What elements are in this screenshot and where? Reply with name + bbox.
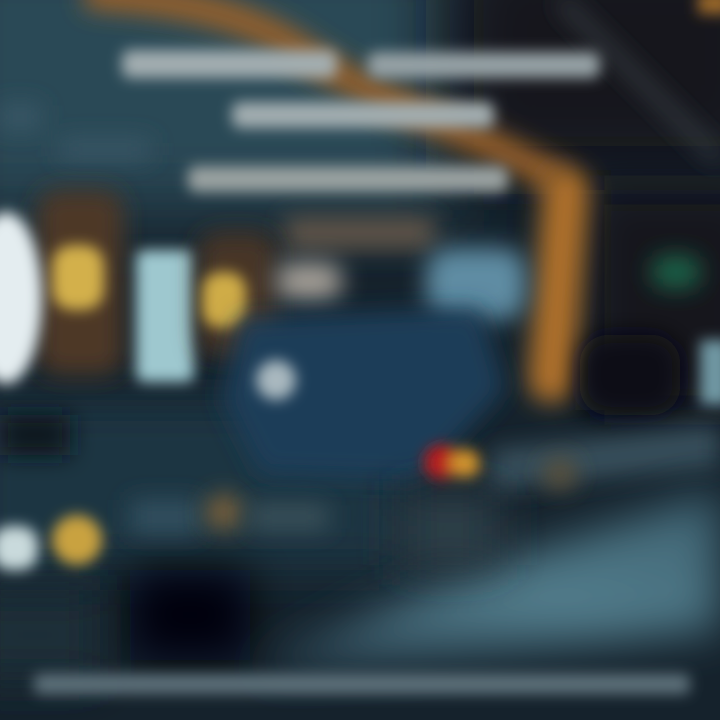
floor: teal diagonal sweep <box>250 490 720 670</box>
dark right-side objects <box>580 335 680 415</box>
lower row: legend items <box>0 494 328 570</box>
panel: second lamp glow <box>198 232 276 357</box>
decorative ceiling streak <box>560 0 720 160</box>
panel: pale teal window <box>136 250 194 382</box>
panel: central navy block <box>222 308 505 480</box>
band: right grey counter <box>490 425 720 490</box>
title: blurred, illegible heading lines <box>122 50 600 192</box>
orange vertical post <box>551 190 566 380</box>
subtitle band <box>285 218 435 248</box>
orange corner accent <box>698 0 720 14</box>
floor: grey patch near the centre <box>400 495 500 565</box>
icon: white dot <box>256 360 296 400</box>
panel: pale shape above the central panel <box>276 262 342 300</box>
orange diagonal beam <box>85 0 560 180</box>
small left wall labels <box>0 105 150 158</box>
panel: left lamp glow <box>38 190 123 375</box>
icon: yellow lower-left light <box>52 515 102 565</box>
icon: amber lower light <box>206 494 242 530</box>
pale right-edge shape <box>700 340 720 405</box>
icon: green light <box>652 256 700 288</box>
icon: red and orange marker <box>424 445 480 481</box>
icon: white lower-left light <box>0 526 38 570</box>
label bar: grey <box>250 505 328 529</box>
lower-left dark shelf <box>0 415 70 455</box>
panel: light blue shape <box>426 248 526 320</box>
icon: small amber marker <box>544 458 576 490</box>
panel: white window at left edge <box>0 212 42 384</box>
footer: blurred, illegible caption line <box>34 674 690 694</box>
label bar: teal <box>130 500 200 534</box>
